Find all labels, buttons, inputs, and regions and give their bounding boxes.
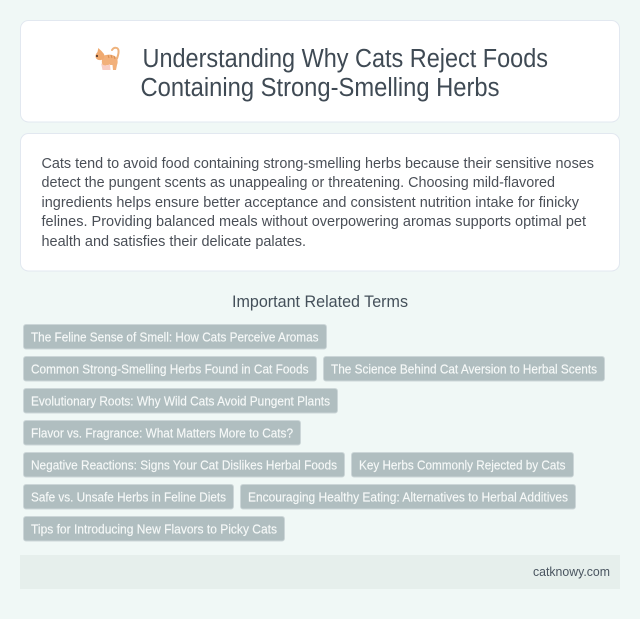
tag: Flavor vs. Fragrance: What Matters More to Cats? xyxy=(31,426,293,440)
tag xyxy=(24,484,234,509)
title: Understanding Why Cats Reject Foods xyxy=(142,45,548,73)
description text: health and satisfies their delicate palates. xyxy=(42,233,306,250)
tag xyxy=(24,388,338,413)
tag xyxy=(24,452,344,477)
description text: felines. Providing balanced meals without overpowering aromas supports optimal pet xyxy=(42,213,587,230)
tag xyxy=(24,420,300,445)
panel: title card xyxy=(20,20,620,122)
tag: Tips for Introducing New Flavors to Picky Cats xyxy=(31,522,277,536)
panel: description xyxy=(20,134,620,271)
tag: Key Herbs Commonly Rejected by Cats xyxy=(359,458,566,472)
tag xyxy=(324,356,604,381)
footer source: catknowy.com xyxy=(533,565,610,579)
tag: Evolutionary Roots: Why Wild Cats Avoid Pungent Plants xyxy=(31,394,330,408)
description text: detect the pungent scents as unappealing or threatening. Choosing mild-flavored xyxy=(42,174,555,191)
description text: Cats tend to avoid food containing strong-smelling herbs because their sensitive noses xyxy=(42,155,594,172)
title xyxy=(140,45,548,102)
tag: The Feline Sense of Smell: How Cats Perceive Aromas xyxy=(31,330,318,344)
icon: cat xyxy=(96,48,119,70)
tag: Safe vs. Unsafe Herbs in Feline Diets xyxy=(31,490,226,504)
tag: The Science Behind Cat Aversion to Herbal Scents xyxy=(331,362,597,376)
tag xyxy=(24,324,326,349)
tag: Common Strong-Smelling Herbs Found in Cat Foods xyxy=(31,362,308,376)
description text xyxy=(42,155,594,250)
heading: related terms: Important Related Terms xyxy=(232,293,408,311)
tag xyxy=(24,356,316,381)
tag: Encouraging Healthy Eating: Alternatives to Herbal Additives xyxy=(248,490,568,504)
tag: Negative Reactions: Signs Your Cat Dislikes Herbal Foods xyxy=(31,458,337,472)
title: Containing Strong-Smelling Herbs xyxy=(140,74,500,102)
footer xyxy=(20,555,620,589)
tag xyxy=(352,452,574,477)
description text: ingredients helps ensure better acceptance and consistent nutrition intake for finicky xyxy=(42,194,579,211)
tag xyxy=(240,484,576,509)
tag xyxy=(24,516,284,541)
related term tags xyxy=(24,324,604,541)
